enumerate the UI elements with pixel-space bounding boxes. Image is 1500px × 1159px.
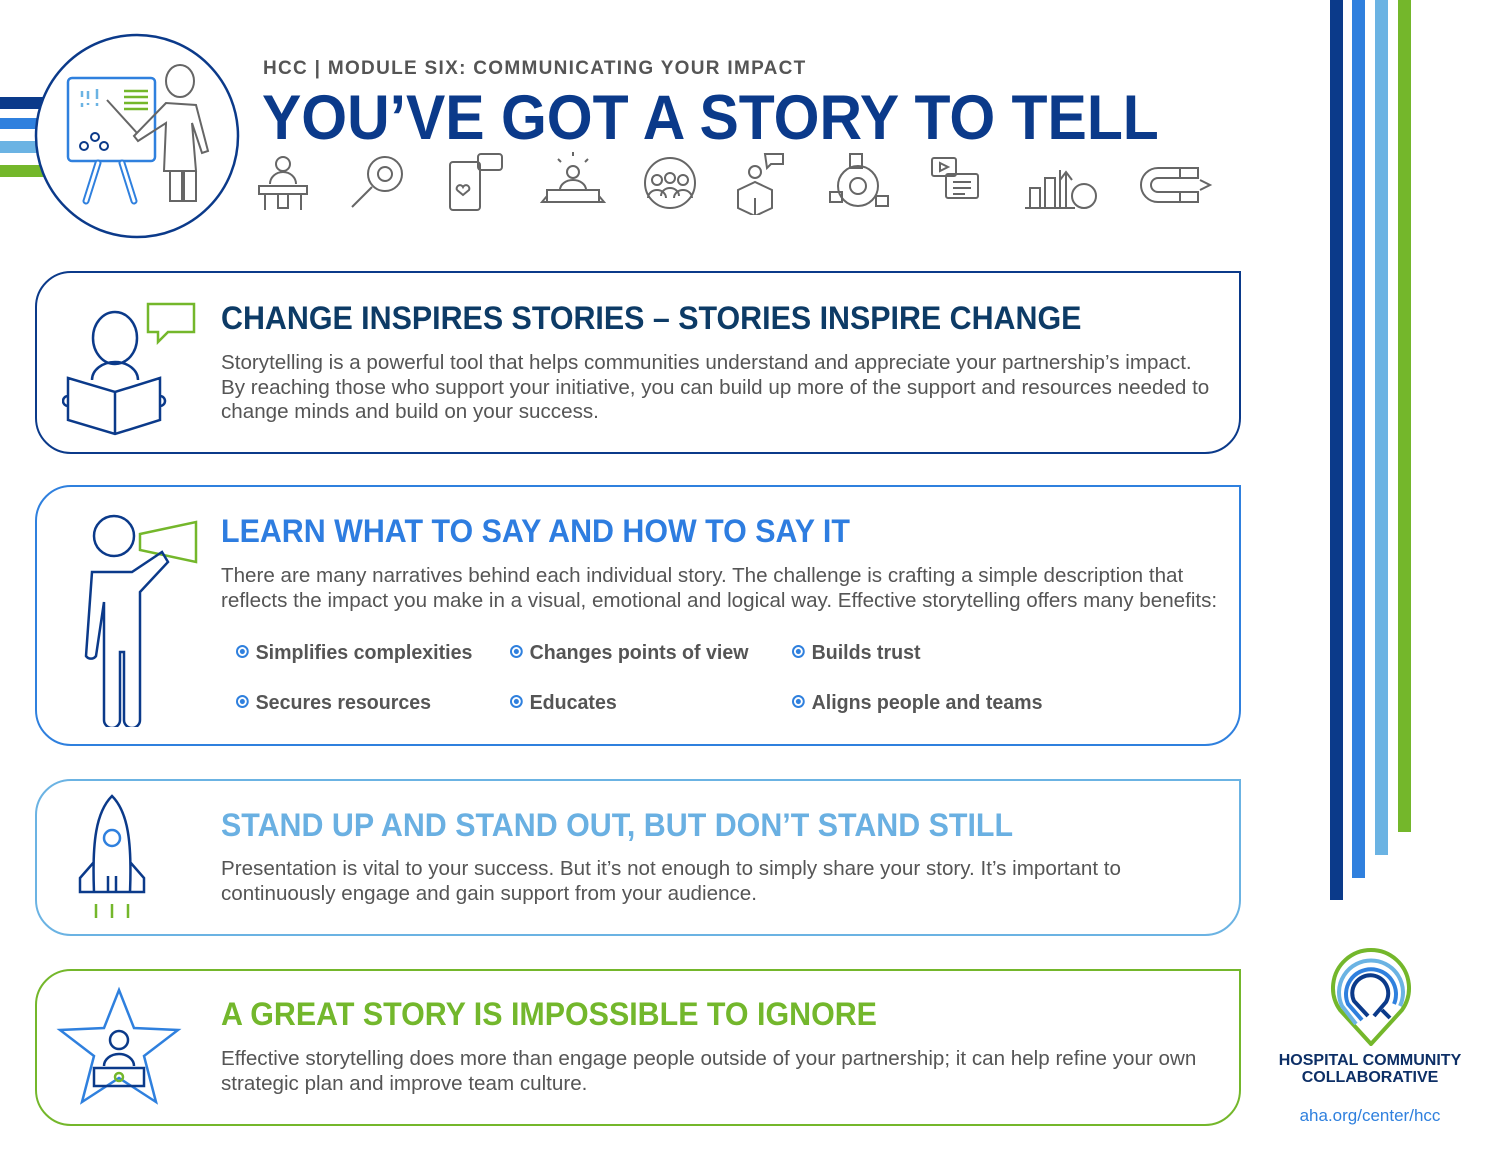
panel: stand up — [35, 779, 1241, 936]
text 4: strategic plan and improve team culture. — [221, 1072, 587, 1094]
heading 4: A GREAT STORY IS IMPOSSIBLE TO IGNORE — [221, 996, 877, 1032]
title: YOU’VE GOT A STORY TO TELL — [262, 83, 1159, 153]
text 3 — [221, 858, 1121, 904]
icon: person with megaphone — [84, 514, 198, 727]
text 2: There are many narratives behind each individual story. The challenge is crafting a simple description that — [221, 565, 1183, 587]
heading 1: CHANGE INSPIRES STORIES – STORIES INSPIRE CHANGE — [221, 300, 1081, 336]
icon: star with person — [56, 986, 182, 1105]
panel: learn what to say — [35, 485, 1241, 746]
text 1: By reaching those who support your initiative, you can build up more of the support and resources needed to — [221, 376, 1209, 398]
bullets: Builds trust — [812, 642, 921, 664]
bullets — [236, 642, 1042, 714]
text 4 — [221, 1048, 1196, 1094]
icon: presenter circle — [34, 34, 240, 238]
icon: rocket — [78, 794, 146, 918]
heading 2: LEARN WHAT TO SAY AND HOW TO SAY IT — [221, 513, 850, 549]
text 1: change minds and build on your success. — [221, 401, 599, 423]
icon: reader with book — [62, 302, 196, 436]
logo — [1279, 948, 1461, 1125]
text 1: Storytelling is a powerful tool that helps communities understand and appreciate your partnership’s impact. — [221, 352, 1192, 374]
bullets: Changes points of view — [530, 642, 748, 664]
logo: aha.org/center/hcc — [1300, 1106, 1440, 1125]
text 2 — [221, 565, 1217, 612]
text 4: Effective storytelling does more than engage people outside of your partnership; it can help refine your own — [221, 1048, 1196, 1070]
bullets: Aligns people and teams — [812, 692, 1042, 714]
heading 3: STAND UP AND STAND OUT, BUT DON’T STAND STILL — [221, 807, 1013, 843]
panel: change inspires stories — [35, 271, 1241, 454]
logo: HOSPITAL COMMUNITY — [1279, 1052, 1461, 1069]
logo: COLLABORATIVE — [1302, 1069, 1438, 1086]
icon row — [258, 152, 1212, 215]
text 3: Presentation is vital to your success. But it’s not enough to simply share your story. It’s important to — [221, 858, 1121, 880]
panel: great story — [35, 969, 1241, 1126]
bullets: Educates — [530, 692, 617, 714]
bullets: Simplifies complexities — [256, 642, 472, 664]
subtitle: HCC | MODULE SIX: COMMUNICATING YOUR IMPACT — [263, 58, 807, 79]
text 1 — [221, 352, 1209, 423]
text 3: continuously engage and gain support from your audience. — [221, 882, 757, 904]
text 2: reflects the impact you make in a visual, emotional and logical way. Effective storytelling offers many benefits: — [221, 590, 1217, 612]
bullets: Secures resources — [256, 692, 431, 714]
